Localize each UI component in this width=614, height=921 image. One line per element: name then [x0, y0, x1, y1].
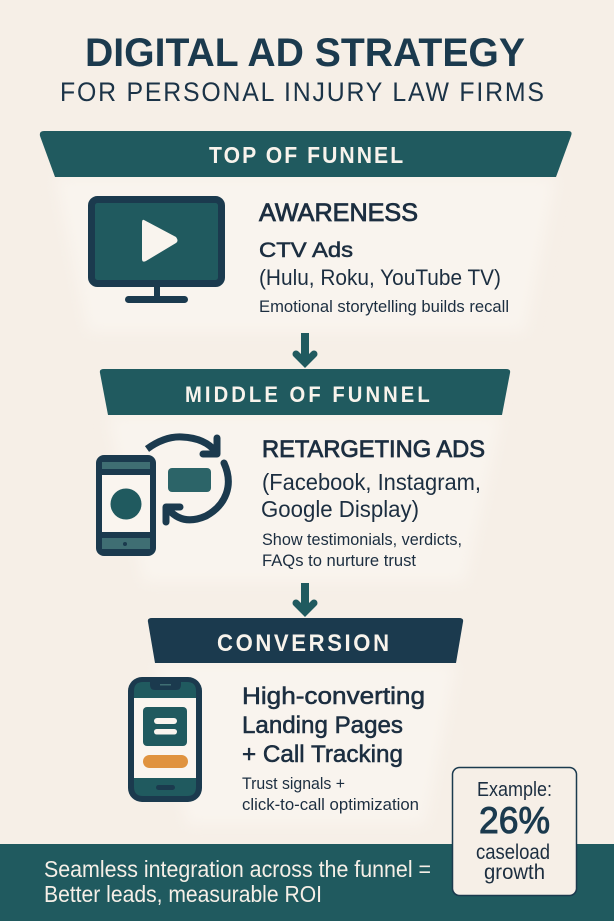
arrow: top to middle [296, 333, 314, 363]
callout: 26% caseload growth: caseload [476, 841, 550, 864]
banner: top of funnel: TOP OF FUNNEL [209, 142, 403, 168]
icon: TV with play button [92, 200, 222, 303]
banner: conversion: CONVERSION [217, 629, 389, 656]
banner: conversion [148, 618, 463, 663]
text: retargeting ads: FAQs to nurture trust [262, 552, 416, 570]
footer band [0, 844, 614, 921]
title: DIGITAL AD STRATEGY [85, 31, 525, 75]
text: retargeting ads: RETARGETING ADS [262, 436, 485, 463]
panel: middle of funnel [96, 369, 510, 582]
panel background: conversion [155, 663, 456, 825]
text: retargeting ads: Google Display) [261, 496, 419, 522]
panel background: middle [108, 415, 502, 582]
banner: top of funnel [40, 131, 572, 177]
panel: top of funnel [40, 131, 572, 332]
text: landing pages: Landing Pages [242, 712, 403, 739]
banner: middle of funnel: MIDDLE OF FUNNEL [185, 383, 430, 407]
text: awareness: AWARENESS [259, 199, 418, 227]
panel background: top [55, 177, 556, 332]
arrow: middle to conversion [296, 583, 314, 612]
text: landing pages [242, 683, 425, 814]
text: awareness: CTV Ads [259, 239, 353, 262]
text: landing pages: + Call Tracking [242, 741, 403, 768]
text: retargeting ads: Show testimonials, verdicts, [262, 531, 462, 549]
title: FOR PERSONAL INJURY LAW FIRMS [60, 78, 544, 107]
text: awareness [259, 199, 509, 316]
title [60, 31, 544, 107]
callout: 26% caseload growth: growth [484, 861, 545, 884]
text: retargeting ads: (Facebook, Instagram, [262, 469, 481, 495]
callout: 26% caseload growth: Example: [477, 779, 552, 801]
text: retargeting ads [261, 436, 485, 570]
callout: 26% caseload growth [452, 768, 576, 896]
icon: phone with retargeting loop [96, 437, 228, 556]
footer band: Seamless integration across the funnel = [44, 856, 431, 882]
text: landing pages: click-to-call optimization [242, 795, 419, 814]
callout: 26% caseload growth: 26% [479, 800, 550, 841]
text: awareness: Emotional storytelling builds recall [259, 297, 509, 316]
icon: phone landing page [128, 677, 202, 802]
banner: middle of funnel [100, 369, 510, 415]
footer band: Better leads, measurable ROI [44, 881, 322, 907]
text: landing pages: Trust signals + [242, 774, 345, 793]
text: landing pages: High-converting [242, 683, 425, 710]
panel: conversion [128, 618, 463, 825]
text: awareness: (Hulu, Roku, YouTube TV) [259, 265, 501, 290]
